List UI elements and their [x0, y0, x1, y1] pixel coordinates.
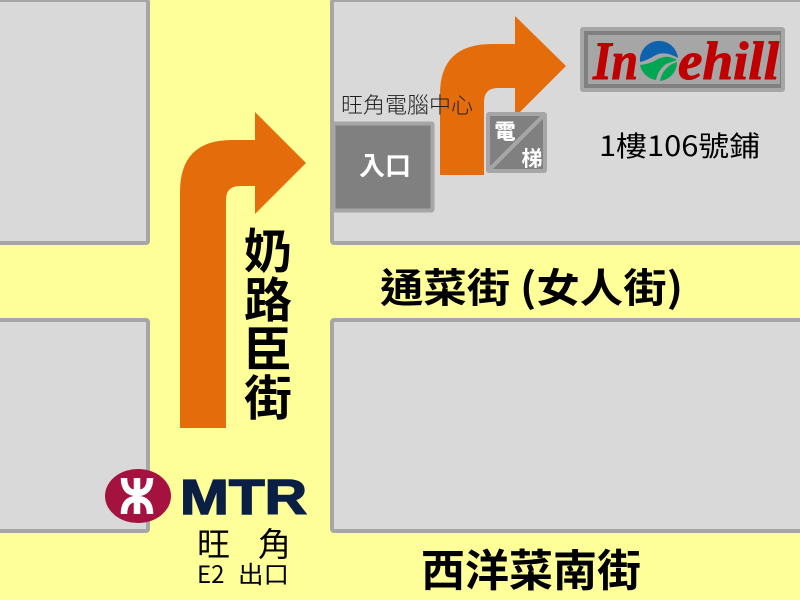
station name: 旺角: 旺 — [197, 518, 230, 566]
MTR wordmark: MTR — [180, 471, 307, 525]
street name: 奶路臣街: 路 — [244, 261, 292, 331]
arrow: route inside building — [440, 16, 566, 175]
street name: 通菜街 (女人街): 通菜街 (女人街) — [380, 256, 683, 314]
station name: 旺角: 角 — [258, 518, 291, 566]
block: middle left — [0, 320, 148, 531]
arrow: route from MTR to building — [180, 112, 306, 428]
logo globe — [640, 41, 678, 81]
block: top left — [0, 0, 148, 243]
entrance box: 入口 — [359, 146, 411, 183]
street name: 奶路臣街: 臣 — [244, 310, 292, 380]
label: shop number: 1樓106號鋪 — [599, 125, 760, 165]
elevator box: 電 — [494, 116, 516, 146]
street name: 奶路臣街 — [244, 212, 292, 429]
MTR logo — [105, 469, 307, 525]
MTR roundel — [105, 469, 171, 523]
block: middle right — [332, 320, 800, 531]
entrance box — [334, 124, 432, 210]
station exit: E2 出口: 出口 — [238, 555, 289, 590]
station exit: E2 出口 — [197, 555, 289, 590]
station name: 旺角 — [197, 518, 291, 566]
street name: 西洋菜南街: 西洋菜南街 — [421, 535, 641, 599]
shop logo: Innohill — [582, 29, 783, 91]
logo text: ehill — [678, 31, 779, 91]
street name: 奶路臣街: 街 — [244, 359, 292, 429]
station exit: E2 出口: E2 — [197, 555, 224, 590]
block: top right — [332, 0, 800, 243]
label: building name: 旺角電腦中心 — [341, 88, 473, 120]
logo text: In — [592, 31, 638, 91]
street name: 奶路臣街: 奶 — [244, 212, 292, 282]
elevator box — [488, 114, 545, 173]
elevator box: 梯 — [522, 143, 542, 173]
